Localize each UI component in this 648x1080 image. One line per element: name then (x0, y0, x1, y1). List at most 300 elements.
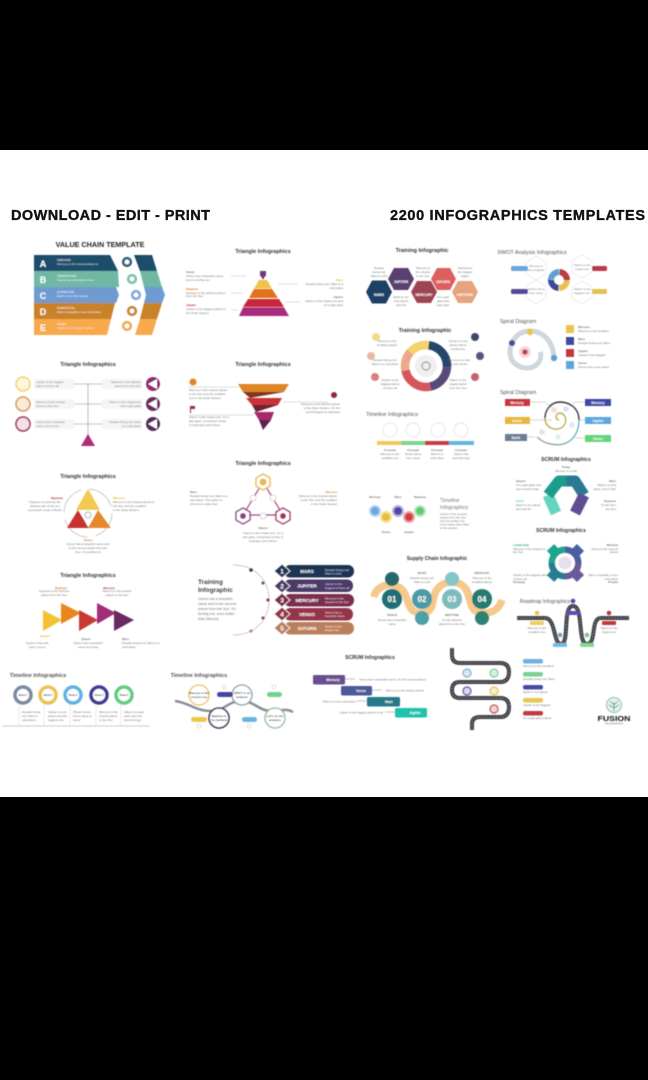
panel: funnel zigzag: one in the Solar System (189, 396, 221, 400)
panel: roadmap infographics: ringed one (602, 630, 616, 634)
panel: funnel zigzag: gas giant, composed mostly (189, 419, 227, 423)
panel: triangle with three sections: composite music of Earth (28, 508, 62, 512)
panel: scrum hexagon: Mars (609, 479, 616, 483)
panel: timeline infographics with bar: nice name (406, 456, 420, 460)
panel: roadmap infographics: Roadmap Infographics (520, 599, 571, 605)
panel: value chain template: VALUE CHAIN TEMPLATE (56, 240, 145, 249)
panel: timeline circles bottom left: planet and the (48, 714, 67, 718)
panel: timeline hexagon circles: even hotter than Mars (440, 522, 470, 526)
panel: timeline hexagon circles: Infographics (440, 505, 469, 511)
panel: value chain template: OPERATIONS (57, 274, 76, 278)
panel: training infographic list: closest to the Sun (325, 600, 349, 604)
panel: triangle with hexagon nodes: to the Sun and the smallest (301, 498, 337, 502)
panel: timeline hexagon circles: Venus (382, 530, 391, 534)
panel: training infographic list: MARS (300, 569, 314, 574)
panel: training infographic donut: Saturn is the (450, 378, 467, 382)
panel: timeline circles bottom left: Despite being (22, 710, 41, 714)
panel: triangle pyramid: the Solar System (186, 311, 209, 315)
panel: training infographic donut: The sun is a star (448, 358, 470, 362)
panel: wave timeline: Mercury is the (189, 691, 210, 695)
panel: supply chain infographic: name (388, 622, 396, 626)
panel: triangle infographics with central stem: planet of them all (36, 384, 59, 388)
panel: training infographic hexagons: It's a gas (437, 295, 449, 299)
panel: swot analysis: Venus has a (528, 287, 545, 291)
panel: scrum hexagon: and has life (516, 507, 532, 511)
panel: training infographic donut: terribly hot (451, 347, 465, 351)
panel: value chain template: MARKETING (57, 306, 76, 310)
panel: triangle with three sections: Sun. It's terribly hot (75, 550, 101, 554)
panel: triangle pyramid (186, 249, 343, 316)
panel: triangle with three sections: the Sun and the smallest (113, 504, 146, 508)
panel: triangle pyramid: Jupiter is the biggest planet in (186, 307, 226, 311)
panel: wave timeline: the farthest (211, 718, 227, 722)
panel: scrum hexagon: Mercury is small (555, 469, 577, 473)
panel: winding road: Jupiter is the biggest (523, 703, 551, 707)
panel: funnel zigzag: Mercury is the closest planet (189, 388, 227, 392)
panel: value chain template: Earth is the third planet (57, 294, 88, 298)
panel: training infographic list: SATURN (298, 626, 317, 631)
panel: scrum hexagon: the Sun (606, 507, 616, 511)
panel: wave timeline: Let's do the (267, 714, 284, 718)
panel: scrum cross (513, 528, 618, 584)
panel: swot analysis (497, 250, 607, 304)
panel: triangle arrow chain: Mercury is the closest (102, 589, 132, 593)
panel: triangle infographics with central stem: Venus has a beautiful (36, 420, 65, 424)
panel: timeline infographics with bar: Concept (455, 448, 467, 452)
panel: training infographic donut: Venus is a hot (449, 339, 468, 343)
panel: timeline infographics with bar: Saturn has (454, 452, 469, 456)
panel: timeline hexagon circles: Venus is the second (440, 512, 467, 516)
panel: training infographic donut: smallest planet (377, 343, 397, 347)
panel: triangle pyramid: Venus has a beautiful name, (186, 274, 224, 278)
panel: training infographic hexagons: MERCURY (415, 293, 433, 297)
panel: training infographic list: 3 (280, 598, 284, 604)
panel: training infographic hexagons: NEPTUNE (457, 293, 474, 297)
panel: triangle arrow chain: many moons (28, 645, 46, 649)
panel: spiral diagram two: Mercury (510, 401, 524, 405)
panel: timeline circles bottom left (2, 673, 150, 726)
panel: training infographic list: name and is the second (198, 602, 236, 606)
panel: swot analysis: the smallest (528, 268, 544, 272)
panel: timeline infographics with bar: Timeline Infographics (366, 412, 418, 418)
panel: timeline circles bottom left: Timeline Infographics (10, 673, 66, 679)
panel: scrum cross: People (608, 580, 618, 584)
panel: spiral diagram one: Despite being red, Mars (578, 341, 610, 345)
panel: triangle with hexagon nodes: Mercury is the closest planet (299, 494, 337, 498)
white content panel (0, 150, 648, 797)
panel: triangle pyramid: but it's terribly hot (186, 278, 210, 282)
panel: timeline hexagon circles: and it's terribly hot, (440, 519, 465, 523)
panel: training infographic hexagons: Neptune is (458, 266, 473, 270)
panel: timeline circles bottom left: Week 5 (120, 693, 129, 697)
panel: spiral diagram two: Jupiter (592, 419, 604, 423)
panel: supply chain infographic: Venus has a beautiful (378, 618, 407, 622)
panel: triangle arrow chain: Despite being red, Mars is a (122, 641, 160, 645)
panel: supply chain infographic: Mars is cold (414, 580, 430, 584)
panel: spiral diagram one: Mars (578, 337, 585, 341)
panel: timeline circles bottom left: Week 1 (19, 693, 28, 697)
panel: triangle arrow chain: Triangle Infographics (60, 573, 116, 579)
panel: timeline hexagon circles: Mars (394, 495, 402, 499)
panel: training infographic hexagons: the closest (416, 270, 430, 274)
panel: triangle arrow chain: cold place (122, 645, 136, 649)
panel: triangle with three sections: Venus (84, 538, 93, 542)
panel: triangle arrow chain: planet from the Sun (41, 593, 67, 597)
panel: scrum staircase: Venus has a beautiful name, it's the second planet (359, 678, 426, 682)
panel: value chain template: INBOUND (57, 258, 72, 262)
panel: roadmap infographics: smallest one (529, 630, 546, 634)
panel: training infographic donut: Jupiter is the (381, 378, 399, 382)
panel: triangle with hexagon nodes: Saturn is the ringed one. It's a (243, 531, 283, 535)
panel: scrum cross: SCRUM Infographics (536, 528, 586, 534)
panel: roadmap infographics: Saturn is the (601, 626, 618, 630)
panel: triangle arrow chain: planet to the Sun (106, 593, 129, 597)
panel: value chain template (34, 240, 165, 335)
panel: spiral diagram one: Spiral Diagram (500, 319, 537, 325)
panel: training infographic hexagons: the biggest (458, 270, 473, 274)
panel: timeline infographics with bar: Mars is a (431, 452, 443, 456)
panel: triangle with three sections: Venus has a beautiful name and (67, 542, 110, 546)
panel: supply chain infographic: 02 (418, 595, 427, 604)
panel: triangle pyramid: Jupiter (186, 303, 197, 307)
panel: value chain template: D (40, 307, 47, 317)
panel: spiral diagram two: Venus (512, 419, 522, 423)
panel: triangle arrow chain: Jupiter (40, 634, 51, 638)
panel: triangle with three sections: farthest part of the sun (30, 504, 60, 508)
panel: triangle infographics with central stem (16, 362, 160, 446)
panel: training infographic donut: at the center (451, 362, 467, 366)
panel: training infographic hexagons: object (461, 274, 469, 278)
panel: value chain template: Jupiter is the biggest planet (57, 326, 94, 330)
panel: training infographic list: 2 (280, 584, 284, 590)
panel: triangle arrow chain (25, 573, 160, 649)
panel: triangle infographics with central stem: Despite being red, Mars (109, 420, 141, 424)
panel: supply chain infographic: planet from the Sun (439, 622, 465, 626)
panel: scrum hexagon: SCRUM Infographics (541, 457, 591, 463)
panel: supply chain infographic: MARS (418, 571, 426, 575)
panel: triangle infographics with central stem: Jupiter is the biggest (36, 380, 64, 384)
panel: timeline infographics with bar: cold place (430, 456, 444, 460)
panel: timeline circles bottom left: has a name to (73, 714, 92, 718)
panel: timeline hexagon circles (369, 495, 470, 534)
panel: roadmap infographics (517, 599, 629, 647)
panel: spiral diagram one: Jupiter (578, 349, 589, 353)
panel: triangle arrow chain: Mercury (103, 586, 115, 590)
panel: training infographic list: Despite being red, (325, 568, 350, 572)
panel: training infographic donut: Mercury is the (378, 339, 397, 343)
panel: timeline circles bottom left: closest planet (99, 714, 118, 718)
panel: timeline circles bottom left: Week 2 (44, 693, 53, 697)
panel: triangle infographics with central stem: Neptune is the farthest (111, 380, 141, 384)
panel: spiral diagram two: Mercury (591, 401, 605, 405)
panel: training infographic donut: Mars is a cold place (372, 362, 399, 366)
panel: training infographic list: 1 (280, 568, 284, 576)
panel: training infographic donut: Despite being red, (373, 358, 397, 362)
panel: triangle arrow chain: Saturn has a beautiful (73, 641, 103, 645)
panel: scrum cross: Venus is the second (591, 547, 618, 551)
panel: timeline circles bottom left: cold place (22, 718, 36, 722)
panel: supply chain infographic: smallest planet (472, 580, 492, 584)
panel: scrum staircase (313, 655, 427, 718)
panel: winding road (452, 648, 555, 730)
panel: scrum cross: of them all (513, 577, 527, 581)
panel: funnel zigzag: Saturn is the ringed one. It's a (189, 415, 229, 419)
panel: funnel zigzag: fourth-largest by diameter (306, 410, 340, 414)
panel: timeline hexagon circles: Timeline (440, 498, 460, 504)
panel: supply chain infographic: 01 (388, 595, 397, 604)
panel: timeline circles bottom left: biggest one (48, 718, 64, 722)
panel: wave timeline: SWOT is an (234, 691, 250, 695)
panel: training infographic hexagons: Despite (374, 266, 384, 270)
panel: training infographic list: Training (198, 579, 223, 586)
panel: training infographic list: Mars is cold (325, 572, 341, 576)
panel: scrum hexagon: Earth (516, 499, 524, 503)
panel: training infographic list: Venus has a (325, 610, 342, 614)
panel: supply chain infographic: NEPTUNE (445, 613, 459, 617)
panel: funnel zigzag: in the Solar System. It's the (304, 406, 340, 410)
panel: spiral diagram two: Venus (593, 437, 603, 441)
panel: triangle arrow chain: Saturn (81, 637, 91, 641)
panel: triangle arrow chain: name and rings (78, 645, 99, 649)
panel: training infographic hexagons: Earth is our (393, 295, 409, 299)
panel: timeline infographics with bar (366, 412, 474, 460)
panel: triangle infographics with central stem: name, but it's hot (36, 424, 59, 428)
panel: training infographic list: biggest of them all (325, 586, 350, 590)
panel: timeline hexagon circles: Mercury (369, 495, 381, 499)
panel: wave timeline (171, 673, 293, 728)
panel: triangle with hexagon nodes: Mars (190, 490, 197, 494)
panel: training infographic hexagons: JUPITER (394, 280, 409, 284)
panel: supply chain infographic: Mercury is the (473, 576, 492, 580)
panel: triangle infographics with central stem: planet to the Sun (36, 404, 59, 408)
panel: timeline circles bottom left: Jupiter is your (48, 710, 67, 714)
panel: training infographic list: Venus has a beautiful (198, 597, 233, 601)
panel: timeline circles bottom left: Saturn is a gas (124, 710, 145, 714)
panel: scrum staircase: Mercury (326, 678, 340, 682)
panel: timeline circles bottom left: Planet Venus (73, 710, 91, 714)
panel: training infographic donut: from the Sun (449, 386, 467, 390)
panel: spiral diagram one: Mercury is the smallest (578, 329, 609, 333)
panel: triangle with hexagon nodes: gas giant, composed mostly of (243, 535, 283, 539)
panel: triangle with hexagon nodes: Saturn (258, 526, 268, 530)
panel: triangle infographics with central stem: and a gas giant (120, 404, 141, 408)
panel: triangle arrow chain: Jupiter is big with (25, 641, 49, 645)
panel: timeline circles bottom left: Week 3 (69, 693, 78, 697)
panel: triangle with three sections: Triangle Infographics (60, 474, 116, 480)
panel: scrum cross: Strategy (513, 580, 525, 584)
panel: swot analysis: Jupiter is the (573, 287, 591, 291)
panel: training infographic list (198, 564, 354, 635)
panel: timeline infographics with bar: smallest one (382, 456, 399, 460)
panel: value chain template: Mars is actually a very cold place (57, 310, 101, 314)
panel: timeline circles bottom left: Mercury is the (99, 710, 118, 714)
panel: funnel zigzag (189, 362, 340, 430)
panel: training infographic hexagons: to the Sun (416, 274, 430, 278)
panel: scrum hexagon (516, 457, 616, 513)
panel: training infographic list: 5 (280, 626, 284, 632)
panel: triangle with three sections: Mercury is the closest planet to (113, 500, 155, 504)
panel: triangle pyramid: it's a gas giant (324, 303, 343, 307)
panel: triangle pyramid: Neptune (186, 287, 198, 291)
panel: scrum hexagon: It's a gas giant and (516, 483, 541, 487)
panel: scrum cross: Mercury is the closest to (513, 547, 546, 551)
panel: timeline infographics with bar: Concept (384, 448, 396, 452)
panel: wave timeline: closest one (191, 695, 208, 699)
panel: scrum hexagon: Neptune (604, 499, 616, 503)
panel: supply chain infographic (374, 556, 502, 626)
panel: timeline circles bottom left: several rings (124, 718, 142, 722)
panel: triangle with hexagon nodes: Triangle Infographics (235, 461, 291, 467)
panel: training infographic list: beautiful name (325, 614, 345, 618)
panel: training infographic donut: planet that is (449, 343, 467, 347)
panel: swot analysis: biggest one (574, 291, 590, 295)
panel: triangle pyramid: Mars (336, 278, 343, 282)
panel: training infographic list: terribly hot, even hotter (198, 612, 236, 616)
panel: training infographic list: VENUS (299, 612, 315, 617)
panel: triangle infographics with central stem: Saturn is the ringed one (109, 400, 141, 404)
heading: 2200 infographics templates: 2200 INFOGRAPHICS TEMPLATES (390, 208, 645, 224)
panel: scrum hexagon: It's far from (601, 503, 616, 507)
panel: winding road: Mercury is the smallest (523, 664, 554, 668)
panel: training infographic hexagons: Mercury is (416, 266, 430, 270)
panel: triangle pyramid: Saturn (333, 295, 343, 299)
panel: training infographic list: planet from the Sun. It's (198, 607, 236, 611)
panel: scrum hexagon: Saturn (516, 479, 526, 483)
panel: triangle pyramid: Triangle Infographics (235, 249, 291, 255)
panel: swot analysis: Saturn is the (574, 263, 591, 267)
panel: spiral diagram one: Mercury (578, 325, 590, 329)
panel: spiral diagram one: Venus has a nice name (578, 365, 610, 369)
panel: triangle with hexagon nodes: full of iron oxide dust (190, 502, 218, 506)
panel: triangle infographics with central stem: planet from the Sun (115, 384, 141, 388)
panel: timeline circles bottom left: giant and has (124, 714, 143, 718)
panel: spiral diagram two: Spiral Diagram (500, 390, 537, 396)
panel: value chain template: OUTBOUND (57, 290, 75, 294)
panel: value chain template: C (40, 291, 47, 301)
panel: training infographic hexagons: being red, (372, 270, 386, 274)
panel: triangle pyramid: cold place (329, 286, 343, 290)
panel: triangle with three sections: in the Solar System (113, 508, 140, 512)
panel: supply chain infographic: It's the farthest (442, 618, 462, 622)
heading: download edit print: DOWNLOAD - EDIT - PRINT (11, 208, 210, 224)
panel: scrum cross: planet (610, 550, 618, 554)
panel: timeline infographics with bar: Venus has a (405, 452, 422, 456)
panel: training infographic hexagons: only planet (394, 299, 408, 303)
panel: training infographic donut: of them all (383, 386, 397, 390)
panel: scrum cross: Mindset (607, 543, 618, 547)
panel: scrum cross: Mars is actually a very (588, 573, 618, 577)
panel: scrum cross: Jupiter is the biggest planet (513, 573, 550, 577)
panel: triangle pyramid: Venus (186, 270, 195, 274)
panel: value chain template: Venus has a beautiful name (57, 278, 94, 282)
panel: scrum hexagon: Mars is a cold (597, 483, 616, 487)
panel: funnel zigzag: Triangle Infographics (235, 362, 291, 368)
panel: triangle with three sections (28, 474, 155, 554)
panel: supply chain infographic: MERCURY (474, 571, 490, 575)
panel: scrum staircase: SCRUM Infographics (345, 655, 395, 661)
panel: scrum hexagon: Today (562, 465, 571, 469)
panel: scrum staircase: Jupiter is the biggest planet of all (339, 710, 383, 714)
panel: supply chain infographic: 04 (478, 595, 487, 604)
panel: timeline hexagon circles: Neptune (414, 495, 426, 499)
panel: training infographic donut: Training Infographic (399, 328, 451, 334)
panel: training infographic list: than Mercury (198, 617, 219, 621)
panel: timeline infographics with bar: several rings (452, 456, 470, 460)
panel: timeline hexagon circles: planet from the Sun (440, 516, 467, 520)
panel: scrum staircase: Mars (385, 700, 393, 704)
panel: timeline circles bottom left: to the Sun (99, 718, 113, 722)
panel: training infographic list: Mercury is the (325, 596, 344, 600)
panel: triangle pyramid: from the Sun (186, 294, 204, 298)
panel: training infographic list: Saturn is the (325, 624, 342, 628)
panel: wave timeline: Neptune is (211, 714, 227, 718)
panel: training infographic donut: biggest planet (381, 382, 400, 386)
panel: timeline infographics with bar: Concept (407, 448, 419, 452)
panel: timeline circles bottom left: Week 4 (95, 693, 104, 697)
panel: training infographic donut (367, 328, 484, 390)
panel: scrum staircase: Mars is a very cold place (323, 700, 356, 704)
panel: training infographic hexagons: has rings (437, 303, 450, 307)
panel: value chain template: B (40, 275, 47, 285)
panel: spiral diagram two: Earth (512, 436, 520, 440)
panel: winding road: It's a gas giant planet (523, 716, 551, 720)
panel: training infographic list: ringed one (325, 628, 340, 632)
logo: fusion: INFOGRAPHICS (605, 722, 624, 726)
panel: spiral diagram one (500, 319, 610, 369)
panel: training infographic hexagons: with life (396, 303, 406, 307)
panel: spiral diagram one: Jupiter is the biggest (578, 353, 606, 357)
panel: training infographic hexagons: Training Infographic (396, 248, 448, 254)
panel: triangle with hexagon nodes: Despite being red, Mars is a (190, 494, 228, 498)
panel: scrum cross: cold place (604, 577, 618, 581)
panel: triangle with three sections: Neptune is currently the (29, 500, 61, 504)
panel: training infographic hexagons: SATURN (436, 280, 450, 284)
panel: training infographic list: Infographic (198, 587, 233, 594)
panel: value chain template: Mercury is the closest planet to (57, 262, 99, 266)
panel: scrum cross: Leadership (513, 543, 529, 547)
panel: training infographic list: JUPITER (297, 584, 317, 588)
panel: triangle with hexagon nodes: hydrogen and helium (249, 539, 278, 543)
panel: funnel zigzag: to the Sun and the smallest (189, 392, 226, 396)
panel: triangle infographics with central stem: Mercury is the closest (36, 400, 65, 404)
panel: training infographic donut: ringed planet (449, 382, 467, 386)
panel: triangle with three sections: Mercury (113, 496, 125, 500)
panel: training infographic hexagons: giant that (437, 299, 449, 303)
panel: triangle arrow chain: Mars (122, 637, 129, 641)
panel: training infographic hexagons: MARS (374, 293, 385, 297)
panel: spiral diagram one: Venus (578, 361, 587, 365)
panel: swot analysis: nice name (529, 291, 543, 295)
panel: winding road: Earth is our planet (523, 690, 548, 694)
panel: timeline hexagon circles: Jupiter (404, 530, 415, 534)
panel: winding road: Despite being red, Mars (523, 677, 555, 681)
panel: triangle with hexagon nodes: Mercury (325, 490, 337, 494)
panel: training infographic list: MERCURY (295, 598, 319, 603)
panel: value chain template: E (40, 323, 46, 333)
panel: supply chain infographic: Supply Chain Infographic (407, 556, 467, 562)
panel: timeline hexagon circles: in the system (440, 526, 458, 530)
panel: scrum staircase: Venus (356, 689, 366, 693)
panel: supply chain infographic: VENUS (387, 613, 397, 617)
panel: funnel zigzag: Neptune is the farthest planet (301, 402, 340, 406)
panel: triangle with hexagon nodes: cold place. The planet is (190, 498, 223, 502)
panel: supply chain infographic: Despite being red, (410, 576, 434, 580)
panel: roadmap infographics: Mercury is the (528, 626, 547, 630)
panel: value chain template: A (40, 259, 47, 269)
panel: scrum staircase: Mercury is the closest planet (386, 688, 424, 692)
panel: value chain template: SALES (57, 322, 67, 326)
panel: triangle pyramid: Despite being red, Mars is a (306, 282, 343, 286)
